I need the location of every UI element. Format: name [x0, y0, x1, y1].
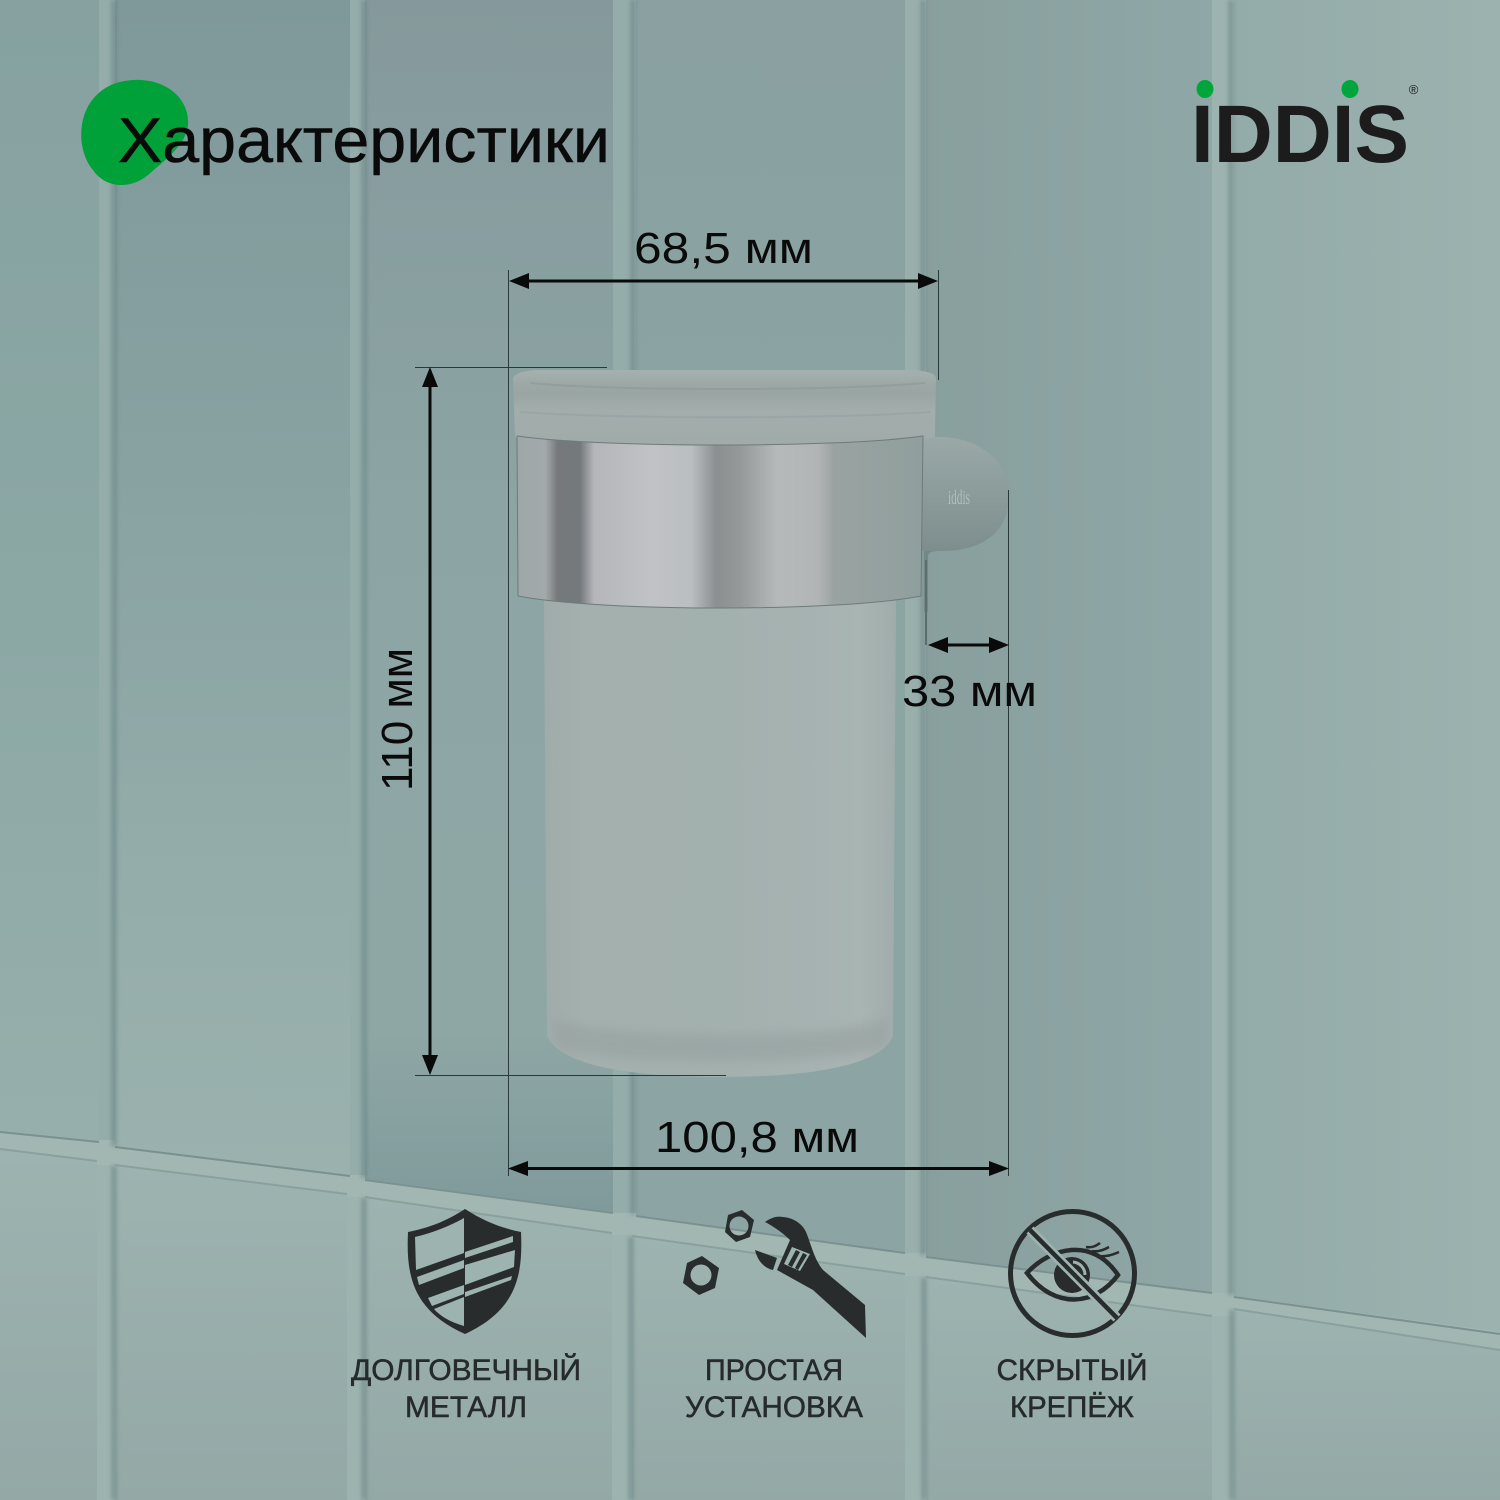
dimension: 33 mm: 33 мм: [902, 667, 1037, 716]
dimension: 68,5 mm: [509, 224, 938, 289]
dimension: 68,5 mm: 68,5 мм: [634, 224, 813, 273]
label: hidden mount, line 2: КРЕПЁЖ: [1010, 1391, 1134, 1424]
product: wall mount: [915, 437, 1009, 612]
product: frosted glass cup: [513, 370, 936, 1077]
label: easy install: ПРОСТАЯ: [705, 1354, 843, 1387]
label: durable metal, line 2: МЕТАЛЛ: [405, 1391, 527, 1424]
logo: IDDIS: IDDIS: [1191, 89, 1409, 180]
label: durable metal: ДОЛГОВЕЧНЫЙ: [351, 1353, 581, 1387]
product: wall mount: iddis: [948, 487, 970, 509]
dimension: 100,8 mm: [508, 1113, 1009, 1176]
dimension: 110 mm: 110 мм: [373, 648, 422, 791]
heading: green blob: [81, 80, 188, 185]
product: brushed metal band: [517, 436, 923, 608]
heading: Характеристики: [118, 106, 610, 176]
icon: shield: [408, 1209, 521, 1334]
dimension guides: [415, 270, 1008, 1176]
label: hidden mount: СКРЫТЫЙ: [996, 1353, 1148, 1387]
dimension: 110 mm: [373, 367, 438, 1075]
logo: IDDIS: ®: [1409, 82, 1419, 97]
icon: hidden eye: [1010, 1212, 1134, 1336]
icon: wrench and nuts: [683, 1210, 866, 1338]
dimension: 33 mm: [902, 637, 1037, 716]
label: easy install, line 2: УСТАНОВКА: [685, 1391, 863, 1424]
dimension: 100,8 mm: 100,8 мм: [655, 1113, 859, 1162]
